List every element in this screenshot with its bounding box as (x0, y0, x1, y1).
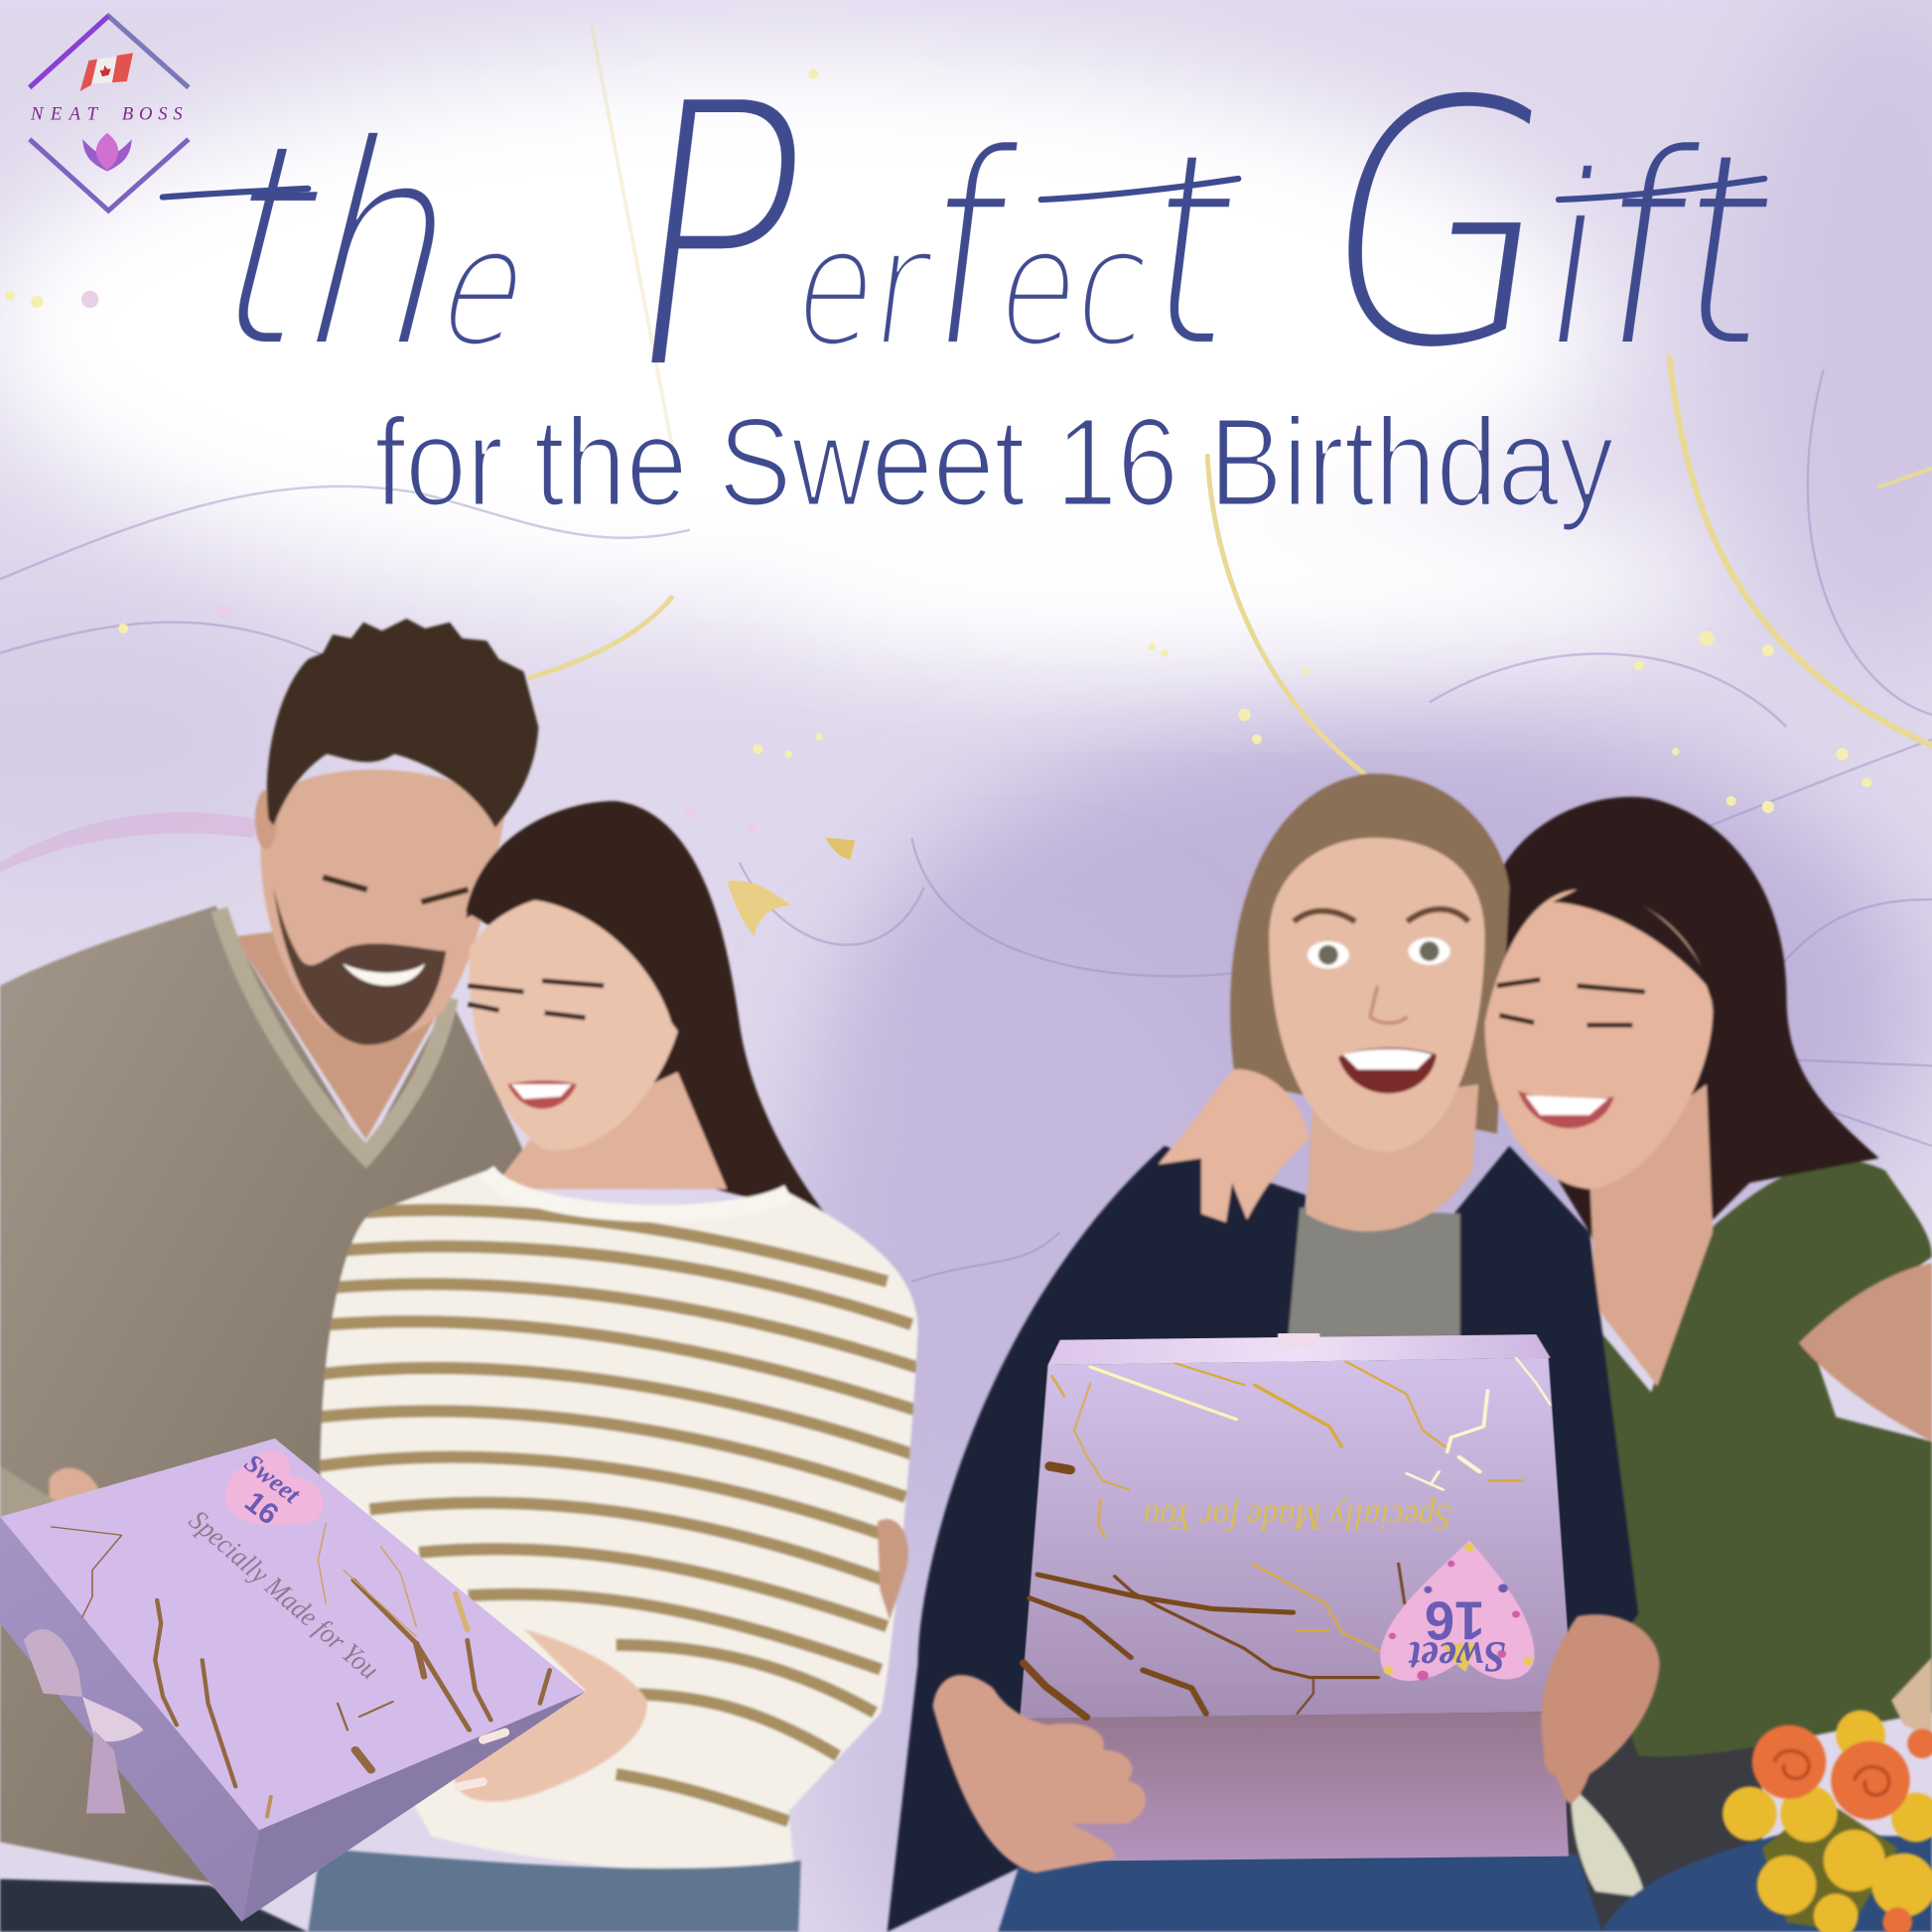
woman features (469, 981, 604, 1109)
box flap (1047, 1334, 1551, 1365)
logo top chevron (30, 16, 189, 87)
knit blanket (1571, 1787, 1645, 1897)
woman A jeans (998, 1855, 1601, 1932)
logo wordmark second word: BOSS (122, 103, 183, 124)
title word: the: the (187, 85, 576, 408)
woman hair front (466, 813, 690, 1047)
man left cuff (0, 1466, 56, 1528)
woman face (469, 894, 681, 1151)
box front face (243, 1692, 585, 1920)
sticker text: Sweet (239, 1449, 306, 1509)
woman hand and wrist (454, 1629, 647, 1802)
gift box: held by woman (0, 1439, 585, 1922)
title word: Perfect: fect (912, 97, 1275, 406)
woman B hair (1484, 797, 1879, 1324)
man sweater (0, 905, 530, 1885)
title word: Perfect: er (786, 196, 939, 381)
logo: Neat Boss (30, 16, 189, 210)
orange roses (1752, 1725, 1932, 1932)
woman B green tee (1589, 1161, 1932, 1756)
woman A hair (1230, 773, 1509, 1134)
hand on shoulder (1159, 1069, 1309, 1222)
gold veins (51, 1524, 550, 1817)
rose petals (1774, 1750, 1889, 1795)
box foil text: right: Specially Made for You (1144, 1498, 1451, 1538)
bench (1565, 1725, 1762, 1932)
subtitle: for the Sweet 16 Birthday (374, 391, 1614, 532)
hand behind woman (878, 1519, 908, 1620)
icon: Canadian flag (80, 53, 133, 91)
right hand on box (1541, 1614, 1660, 1803)
box foil text: left: Specially Made for You (183, 1505, 384, 1686)
sticker: Sweet 16 heart on left box (225, 1449, 324, 1531)
man jeans (0, 1879, 308, 1932)
gift box: held upright (1020, 1333, 1569, 1862)
right photo: two women (888, 773, 1932, 1932)
woman B jeans (1601, 1836, 1932, 1932)
woman B neck (1589, 1084, 1713, 1386)
box lid (0, 1439, 585, 1830)
title t-bar swash: the (163, 189, 308, 198)
left photo: couple (0, 619, 918, 1932)
man neck (234, 911, 450, 1140)
woman A grey shirt (1288, 1207, 1460, 1343)
box side (0, 1517, 585, 1922)
striped sweater (318, 1171, 918, 1874)
left hand on box (932, 1675, 1146, 1872)
leaves (1762, 1799, 1897, 1932)
woman A cardigan (888, 1146, 1639, 1932)
man head (255, 619, 538, 1045)
logo top chevron left accent (30, 16, 108, 87)
box lid (1020, 1358, 1569, 1719)
logo bottom chevron (30, 139, 189, 210)
woman nails (459, 1732, 505, 1787)
woman A face (1269, 838, 1484, 1152)
yellow roses (1723, 1711, 1932, 1932)
sticker number: 16 (1425, 1589, 1484, 1650)
gold veins (1024, 1358, 1551, 1718)
sticker text: upside down Sweet 16 (1408, 1589, 1506, 1682)
icon: lotus hands (82, 133, 132, 172)
left jeans (308, 1849, 801, 1932)
woman hair (466, 801, 828, 1217)
logo wordmark: NEAT (30, 103, 99, 124)
woman neck (492, 1072, 727, 1189)
title t-bar swash: Gift (1559, 179, 1764, 200)
box clasp (1278, 1333, 1319, 1348)
title: the Perfect Gift (163, 26, 1802, 450)
flowers bouquet (1723, 1657, 1932, 1932)
woman B arm (1799, 1263, 1932, 1442)
box base (1022, 1712, 1569, 1862)
sticker number: 16 (238, 1485, 285, 1531)
man collar (219, 909, 450, 1156)
bow ribbon (24, 1629, 143, 1813)
title t-bar swash: Perfect (1041, 179, 1238, 200)
sticker word: Sweet (1408, 1632, 1506, 1682)
woman B face (1484, 889, 1719, 1189)
kraft paper (1891, 1657, 1932, 1737)
heart sticker (1380, 1540, 1534, 1681)
title word: Gift: Gift (1298, 29, 1802, 423)
woman A neck (1307, 1084, 1478, 1231)
title word: Perfect: P (606, 26, 830, 450)
man hand holding box (50, 1468, 101, 1511)
